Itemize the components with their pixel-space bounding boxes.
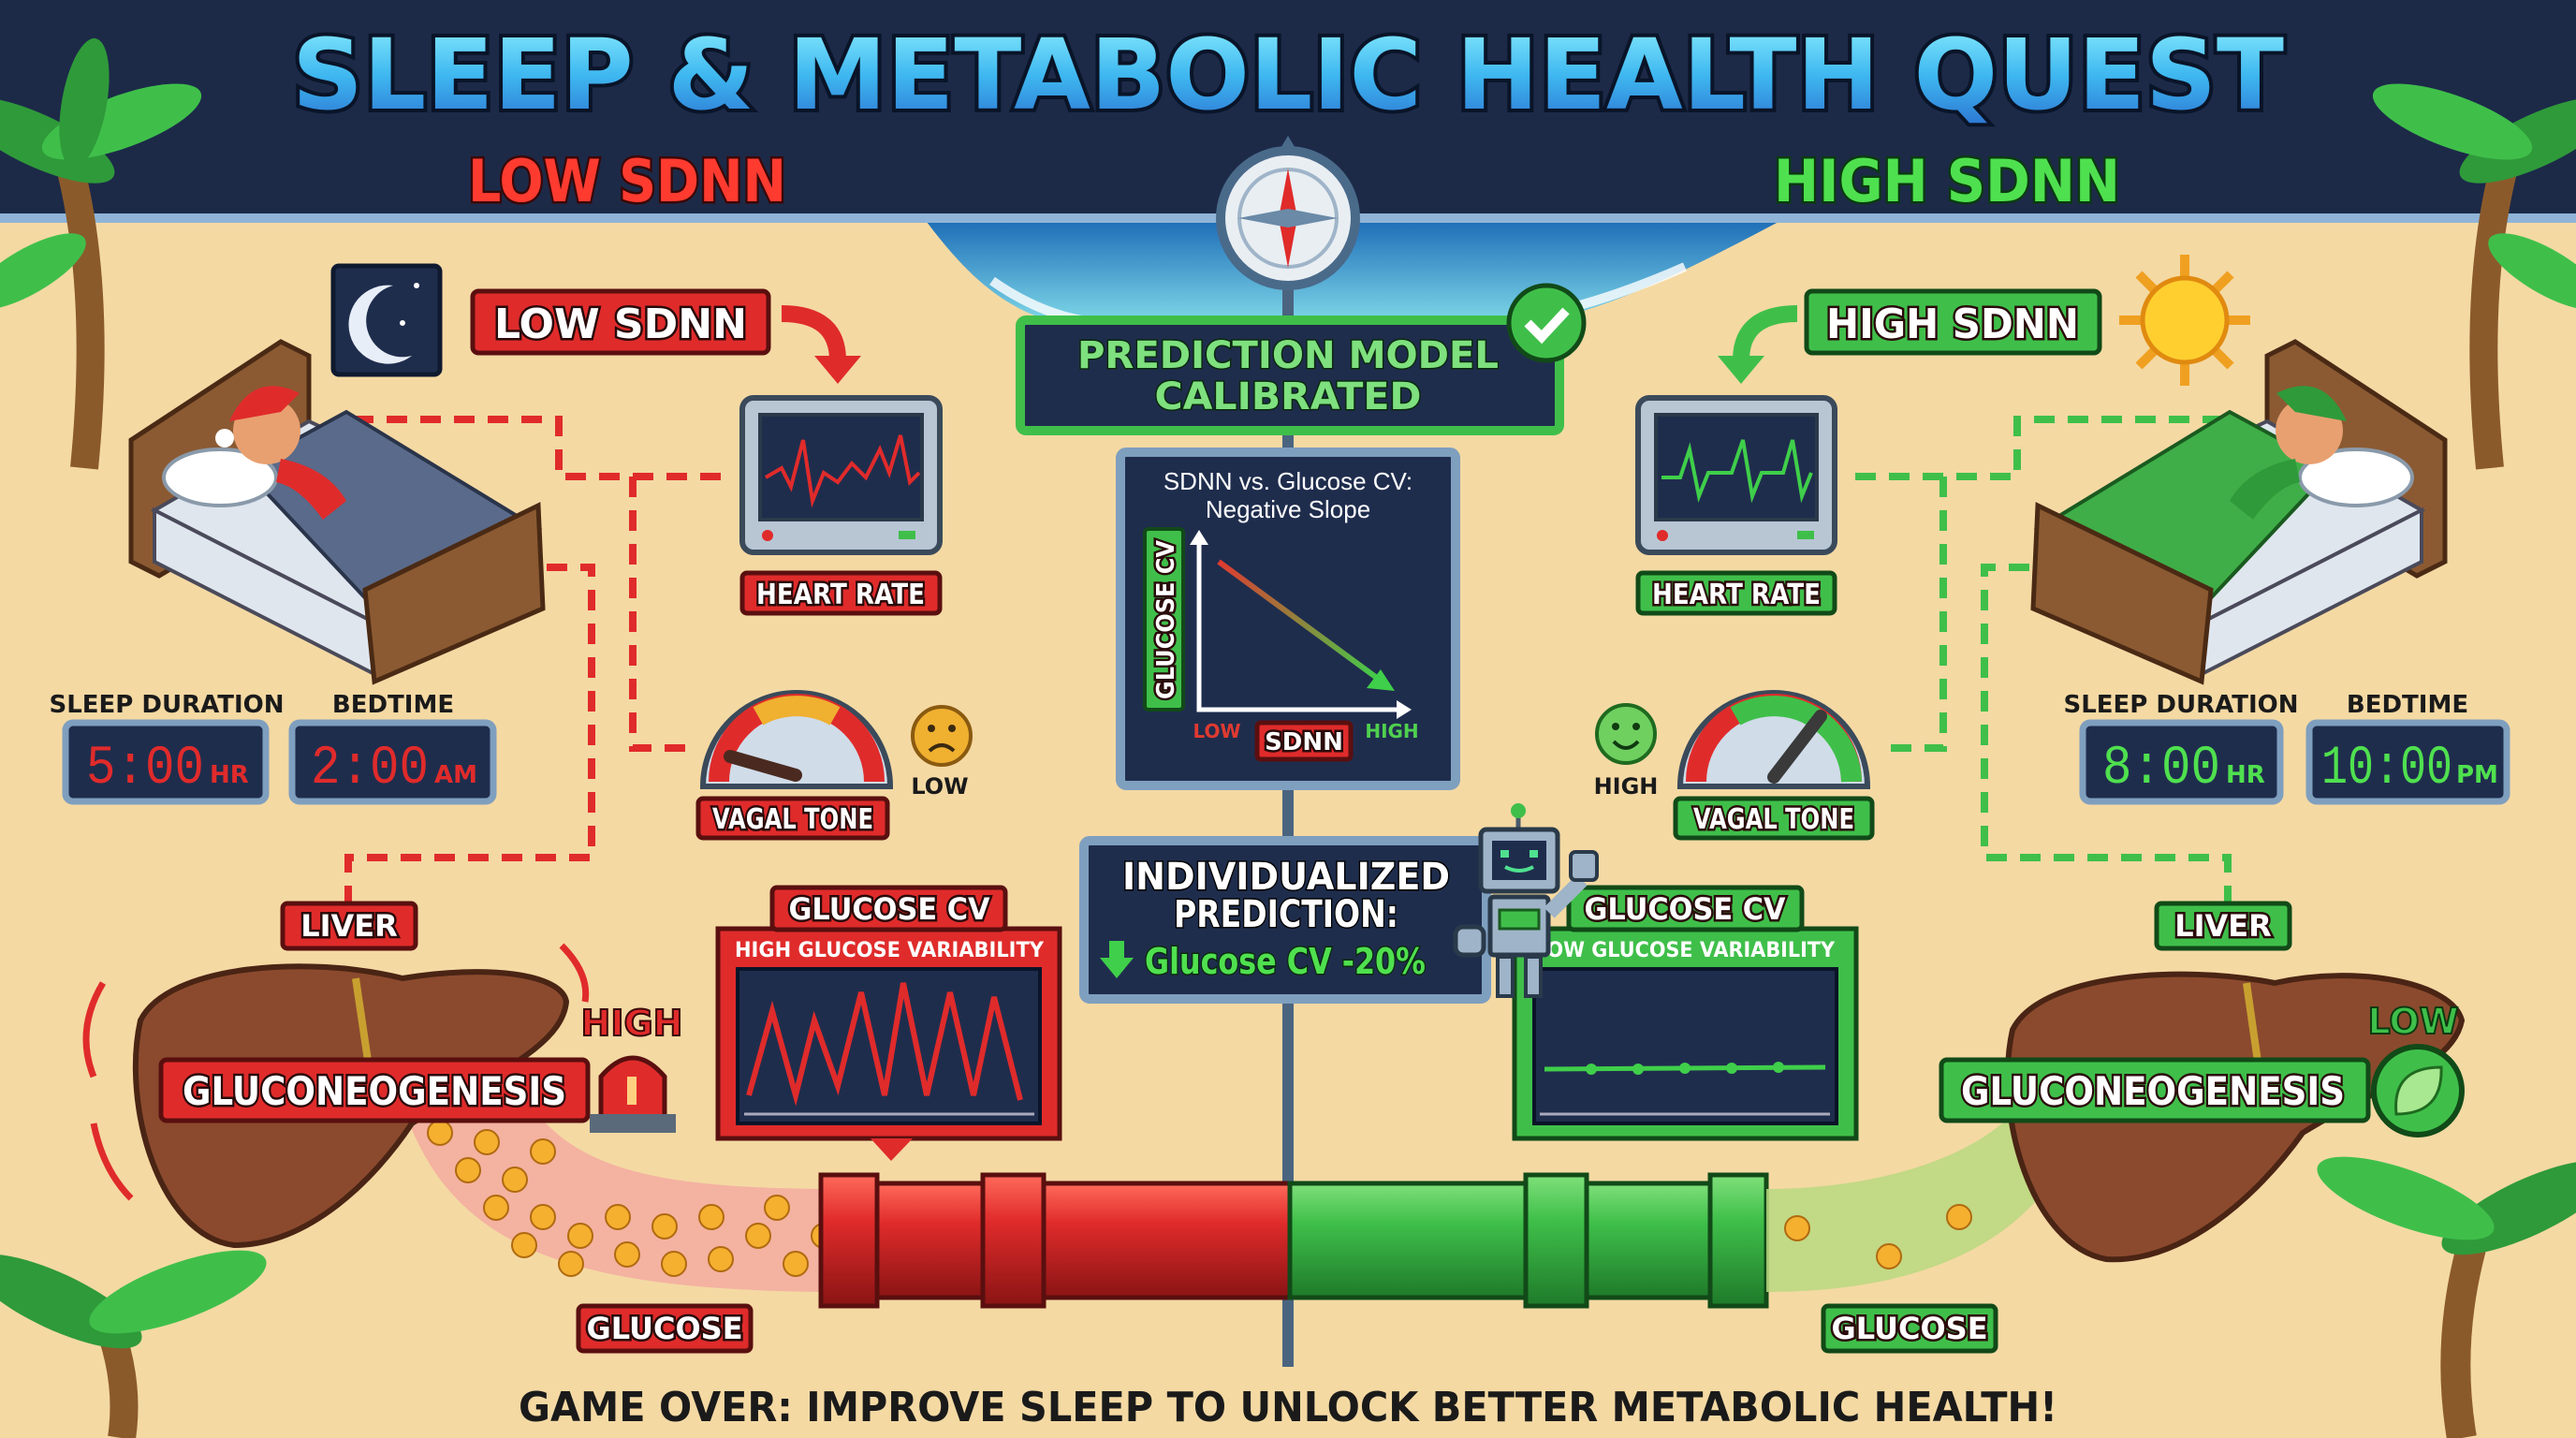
chart: sdnn vs glucose cv: GLUCOSE CV: [1152, 540, 1180, 699]
monitor: heart rate low: [742, 398, 940, 552]
liver low: [86, 946, 586, 1245]
pipe green: [1290, 1175, 1766, 1306]
sleep duration clock high: [2063, 691, 2299, 801]
arrow: green curved: [1718, 314, 1797, 384]
label: heart rate high: HEART RATE: [1652, 579, 1821, 611]
title: SLEEP & METABOLIC HEALTH QUEST: [292, 18, 2284, 132]
sleep duration clock low: HR: [210, 761, 249, 789]
glucose tube right: [1766, 1114, 2059, 1292]
glucose tube left: [402, 1095, 842, 1292]
gauge: vagal tone high: [1680, 693, 1867, 786]
icon: leaf low: [2367, 1001, 2462, 1135]
label: gluconeogenesis low sdnn: GLUCONEOGENESIS: [183, 1068, 566, 1114]
icon: sad face: [911, 707, 971, 800]
center pole: [1282, 271, 1294, 1367]
bedtime clock high: PM: [2456, 761, 2498, 789]
panel: prediction model calibrated: CALIBRATED: [1155, 375, 1421, 418]
sleep duration clock high: 8:00: [2102, 739, 2220, 800]
sleep duration clock low: [49, 691, 285, 801]
panel: glucose cv low: LOW GLUCOSE VARIABILITY: [1535, 939, 1836, 962]
header label: high sdnn: HIGH SDNN: [1774, 147, 2120, 215]
gauge: vagal tone low: [703, 693, 890, 786]
panel: glucose cv high: GLUCOSE CV: [788, 891, 990, 927]
bed: high sdnn: [2033, 342, 2445, 682]
panel: individualized prediction: [1084, 841, 1486, 999]
icon: moon: [333, 266, 440, 374]
label: vagal tone high: VAGAL TONE: [1693, 803, 1854, 836]
bedtime clock high: 10:00: [2321, 739, 2452, 800]
icon: check badge: [1509, 286, 1584, 360]
bedtime clock high: [2309, 691, 2507, 801]
label: glucose right: GLUCOSE: [1831, 1311, 1988, 1346]
icon: happy face: [1594, 705, 1658, 800]
bedtime clock low: BEDTIME: [332, 691, 454, 719]
panel: prediction model calibrated: PREDICTION MODEL: [1077, 334, 1499, 377]
label: gluconeogenesis low sdnn: [161, 1060, 588, 1121]
monitor: heart rate high: [1638, 398, 1835, 552]
panel: glucose cv low: GLUCOSE CV: [1584, 891, 1786, 927]
icon: sun: [2119, 255, 2250, 386]
label: vagal tone: VAGAL TONE: [712, 803, 873, 836]
header label: low sdnn: LOW SDNN: [468, 147, 786, 215]
label: liver high: LIVER: [2174, 908, 2272, 944]
sleep duration clock high: SLEEP DURATION: [2063, 691, 2299, 719]
label: low sdnn: LOW SDNN: [494, 301, 747, 348]
sea waves: [927, 222, 1778, 324]
icon: leaf low: LOW: [2367, 1001, 2459, 1042]
compass: [1221, 136, 1355, 286]
bedtime clock low: AM: [434, 761, 477, 789]
label: low sdnn: [473, 291, 768, 353]
panel: individualized prediction: INDIVIDUALIZED: [1122, 856, 1450, 899]
footer message: GAME OVER: IMPROVE SLEEP TO UNLOCK BETTER METABOLIC HEALTH!: [519, 1384, 2057, 1431]
icon: sad face: LOW: [911, 773, 969, 800]
panel: glucose cv low: [1515, 888, 1856, 1138]
icon: happy face: HIGH: [1594, 773, 1658, 800]
pipe red: [821, 1175, 1290, 1306]
chart: sdnn vs glucose cv: Negative Slope: [1206, 495, 1370, 523]
liver high: [2008, 975, 2462, 1259]
sleep duration clock low: SLEEP DURATION: [49, 691, 285, 719]
label: liver low: LIVER: [300, 908, 398, 944]
panel: glucose cv high: HIGH GLUCOSE VARIABILITY: [735, 939, 1045, 962]
bedtime clock low: [292, 691, 493, 801]
icon: siren high: HIGH: [581, 1003, 682, 1044]
chart: sdnn vs glucose cv: SDNN: [1265, 728, 1343, 756]
panel: individualized prediction: Glucose CV -20%: [1145, 941, 1426, 982]
panel: individualized prediction: PREDICTION:: [1174, 893, 1398, 936]
dashed connectors: low sdnn: [348, 419, 731, 903]
panel: glucose cv high: [718, 888, 1060, 1161]
sleep duration clock low: 5:00: [86, 739, 204, 800]
bed: low sdnn: [131, 342, 543, 682]
label: liver high: [2157, 903, 2290, 948]
header band: [0, 0, 2576, 223]
chart: sdnn vs glucose cv: SDNN vs. Glucose CV:: [1164, 467, 1412, 495]
label: high sdnn: HIGH SDNN: [1826, 301, 2079, 348]
label: liver low: [283, 903, 416, 948]
bedtime clock high: BEDTIME: [2347, 691, 2468, 719]
icon: robot: [1456, 803, 1597, 996]
arrow: red curved: [782, 314, 861, 384]
label: gluconeogenesis high sdnn: [1941, 1060, 2368, 1121]
icon: siren high: [581, 1003, 682, 1133]
label: vagal tone: [698, 799, 887, 838]
dashed connectors: high sdnn: [1845, 419, 2228, 903]
label: heart rate: HEART RATE: [756, 579, 925, 611]
label: glucose left: GLUCOSE: [586, 1311, 743, 1346]
label: vagal tone high: [1676, 799, 1872, 838]
bedtime clock low: 2:00: [311, 739, 429, 800]
chart: sdnn vs glucose cv: HIGH: [1365, 720, 1419, 742]
panel: prediction model calibrated: [1020, 320, 1559, 431]
chart: sdnn vs glucose cv: LOW: [1193, 720, 1241, 742]
label: high sdnn: [1807, 291, 2100, 353]
chart: sdnn vs glucose cv: [1120, 452, 1456, 785]
label: gluconeogenesis high sdnn: GLUCONEOGENESIS: [1961, 1068, 2345, 1114]
sleep duration clock high: HR: [2226, 761, 2265, 789]
